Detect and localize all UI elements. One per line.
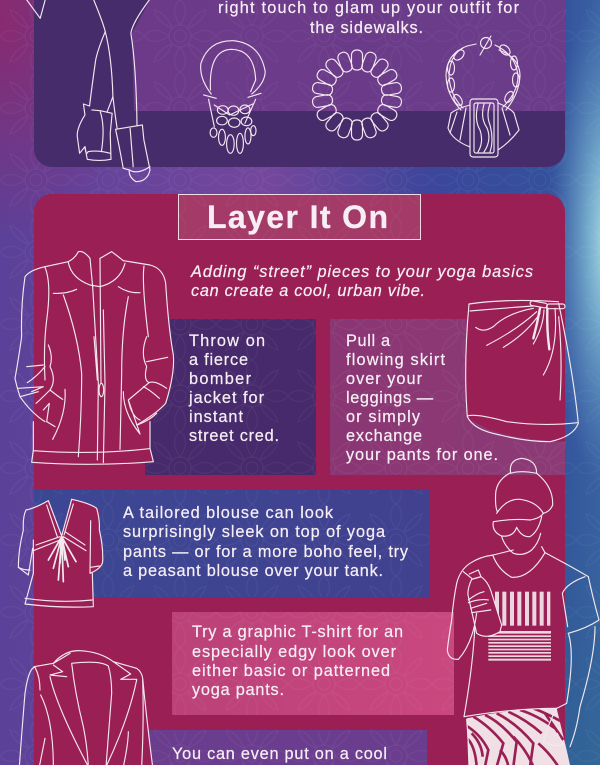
illustration: woman in graphic tee xyxy=(447,458,599,765)
tip box: skirt xyxy=(330,319,565,475)
illustration: bomber jacket xyxy=(15,251,174,464)
tip box: skirt: over your xyxy=(346,370,423,388)
illustration: blazer xyxy=(19,651,153,765)
illustration: wrap skirt xyxy=(466,300,578,442)
tip box: graphic tee: especially edgy look over xyxy=(192,643,397,661)
tip box: skirt: leggings — xyxy=(346,389,434,407)
tip box: blouse: a peasant blouse over your tank. xyxy=(123,562,383,580)
tip box: blouse: pants — or for a more boho feel, try xyxy=(123,543,409,561)
tip box: bomber jacket: street cred. xyxy=(189,427,279,445)
text: accessorize copy xyxy=(218,0,520,37)
tip box: graphic tee xyxy=(172,612,454,715)
intro text: can create a cool, urban vibe. xyxy=(191,282,425,300)
icon: stone bib necklace xyxy=(201,41,265,153)
tip box: graphic tee: either basic or patterned xyxy=(192,662,390,680)
tip box: bomber jacket: Throw on xyxy=(189,332,265,350)
icon: beaded ring necklace xyxy=(312,50,402,140)
tip box: blouse: surprisingly sleek on top of yoga xyxy=(123,523,386,541)
tee graphic bars xyxy=(488,592,551,661)
illustration: legs and boots xyxy=(27,0,150,182)
text: accessorize copy: the sidewalks. xyxy=(310,19,423,37)
tip box: bomber jacket: bomber xyxy=(189,370,252,388)
tip box: blouse: A tailored blouse can look xyxy=(123,504,334,522)
panel: Layer It On xyxy=(34,194,565,765)
tip box: skirt: flowing skirt xyxy=(346,351,445,369)
tip box: skirt: exchange xyxy=(346,427,422,445)
intro text xyxy=(190,263,533,300)
panel: accessorize xyxy=(27,0,565,182)
tip box: bomber jacket xyxy=(145,319,316,475)
heading: Layer It On: Layer It On xyxy=(207,199,388,235)
heading: Layer It On xyxy=(178,194,420,240)
tip box: skirt: or simply xyxy=(346,408,421,426)
tip box: bomber jacket: instant xyxy=(189,408,243,426)
tip box: graphic tee: yoga pants. xyxy=(192,681,284,699)
tip box: cool jacket xyxy=(149,730,427,765)
illustration: blouse xyxy=(18,499,103,607)
zebra leggings xyxy=(465,707,572,765)
tip box: graphic tee: Try a graphic T-shirt for an xyxy=(192,623,403,641)
tip box: bomber jacket: a fierce xyxy=(189,351,248,369)
tip box: skirt: your pants for one. xyxy=(346,446,498,464)
intro text: Adding “street” pieces to your yoga basics xyxy=(190,263,533,281)
icon: pendant necklace xyxy=(446,36,520,157)
tip box: cool jacket: You can even put on a cool xyxy=(172,745,387,763)
tip box: bomber jacket: jacket for xyxy=(188,389,265,407)
tip box: skirt: Pull a xyxy=(346,332,391,350)
tip box: blouse xyxy=(34,490,430,597)
